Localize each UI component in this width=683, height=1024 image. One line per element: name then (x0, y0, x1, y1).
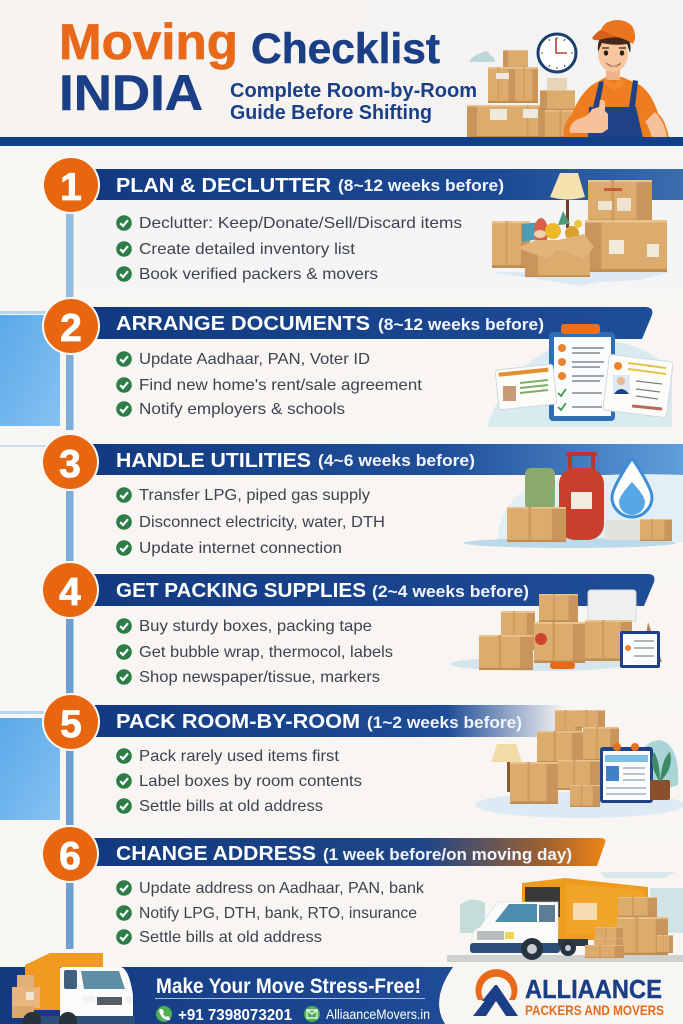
checklist (116, 487, 385, 557)
number badge: 1 (60, 166, 82, 209)
heading banner: PACK ROOM-BY-ROOM (116, 710, 360, 733)
heading banner (90, 307, 652, 339)
checklist (116, 880, 425, 946)
timeline connector (66, 205, 74, 298)
number badge (41, 561, 99, 619)
timeline connector (66, 480, 74, 564)
logo wordmark: ALLIAANCE (525, 974, 662, 1004)
step 3: handle utilities (0, 433, 683, 564)
checklist: Declutter: Keep/Donate/Sell/Discard items (139, 215, 462, 232)
heading banner: (1 week before/on moving day) (323, 846, 572, 864)
panel background (78, 318, 683, 427)
checklist: Transfer LPG, piped gas supply (139, 487, 370, 504)
header panel (0, 0, 683, 138)
timeline connector (66, 740, 74, 825)
checklist: Update internet connection (139, 540, 342, 557)
checklist (116, 351, 423, 418)
title: Checklist: Checklist (251, 25, 440, 73)
checklist: Book verified packers & movers (139, 266, 378, 283)
timeline connector (66, 610, 74, 695)
panel background (78, 585, 683, 692)
header divider bar (0, 137, 683, 146)
number badge: 5 (60, 703, 82, 746)
checklist: Settle bills at old address (139, 929, 322, 946)
checklist: Buy sturdy boxes, packing tape (139, 618, 372, 635)
subtitle: Complete Room-by-Room (230, 79, 477, 102)
number badge (42, 297, 100, 355)
step 6: change address (41, 825, 683, 967)
heading banner: GET PACKING SUPPLIES (116, 579, 366, 602)
checklist: Find new home's rent/sale agreement (139, 377, 423, 394)
contact: website: AlliaanceMovers.in (326, 1006, 430, 1022)
number badge: 3 (59, 443, 81, 486)
checklist: Shop newspaper/tissue, markers (139, 669, 380, 686)
heading banner (90, 444, 683, 475)
illustration: documents and clipboard (487, 324, 673, 427)
heading banner: (8~12 weeks before) (378, 316, 544, 334)
title: Moving: Moving (59, 14, 238, 70)
illustration: stacked boxes, lamp, clipboard, plant (475, 710, 683, 818)
checklist (116, 618, 393, 686)
checklist: Settle bills at old address (139, 798, 323, 815)
heading banner (90, 574, 654, 606)
heading banner: ARRANGE DOCUMENTS (116, 312, 370, 335)
panel background (78, 846, 683, 967)
heading banner (90, 838, 605, 866)
panel background (78, 716, 683, 822)
checklist: Pack rarely used items first (139, 748, 340, 765)
checklist: Label boxes by room contents (139, 773, 362, 790)
logo (473, 969, 664, 1018)
footer banner (0, 953, 683, 1024)
illustration: packing supplies (450, 590, 662, 671)
step 4: get packing supplies (41, 561, 683, 695)
checklist (116, 748, 362, 815)
call to action: Make Your Move Stress-Free! (156, 975, 421, 998)
decorative line (0, 445, 50, 447)
timeline connector (66, 345, 74, 430)
illustration: mover giving thumbs up (564, 20, 669, 138)
heading banner: CHANGE ADDRESS (116, 842, 316, 865)
heading banner (90, 705, 565, 737)
illustration: footer truck (12, 953, 135, 1024)
title: INDIA: INDIA (59, 65, 203, 121)
step 1: plan and declutter (42, 156, 683, 298)
icon: cloud (469, 51, 495, 62)
heading banner: (2~4 weeks before) (372, 583, 529, 601)
logo panel (439, 967, 683, 1024)
contact: phone: +91 7398073201 (178, 1007, 292, 1024)
number badge (42, 693, 100, 751)
step 2: arrange documents (0, 297, 683, 430)
heading banner: (8~12 weeks before) (338, 177, 504, 195)
heading banner: (4~6 weeks before) (318, 452, 475, 470)
subtitle (230, 79, 477, 124)
checklist: Update Aadhaar, PAN, Voter ID (139, 351, 370, 368)
illustration: LPG cylinder, water drop, boxes (464, 452, 683, 548)
heading banner: PLAN & DECLUTTER (116, 174, 331, 197)
decorative blue block (0, 315, 60, 426)
panel background (78, 158, 683, 292)
checklist: Disconnect electricity, water, DTH (139, 514, 385, 531)
decorative blue block (0, 718, 60, 820)
panel background (78, 455, 683, 560)
checklist: Get bubble wrap, thermocol, labels (139, 644, 393, 661)
illustration: stacked boxes (467, 50, 585, 138)
heading banner (90, 169, 683, 200)
number badge (42, 156, 100, 214)
subtitle: Guide Before Shifting (230, 101, 432, 124)
number badge (41, 433, 99, 491)
illustration: moving truck with boxes (447, 872, 683, 962)
number badge (41, 825, 99, 883)
checklist: Notify employers & schools (139, 401, 345, 418)
number badge: 6 (59, 835, 81, 878)
illustration: lamp and boxes (490, 173, 670, 286)
timeline connector (66, 875, 74, 949)
number badge: 2 (60, 307, 82, 350)
checklist (116, 215, 462, 283)
icon: clock (538, 34, 576, 72)
checklist: Update address on Aadhaar, PAN, bank (139, 880, 425, 897)
checklist: Create detailed inventory list (139, 241, 356, 258)
step 5: pack room-by-room (0, 693, 683, 825)
number badge: 4 (59, 571, 81, 614)
checklist: Notify LPG, DTH, bank, RTO, insurance (139, 905, 417, 922)
heading banner: HANDLE UTILITIES (116, 449, 311, 472)
logo mark (473, 969, 518, 1016)
heading banner: (1~2 weeks before) (367, 714, 522, 732)
